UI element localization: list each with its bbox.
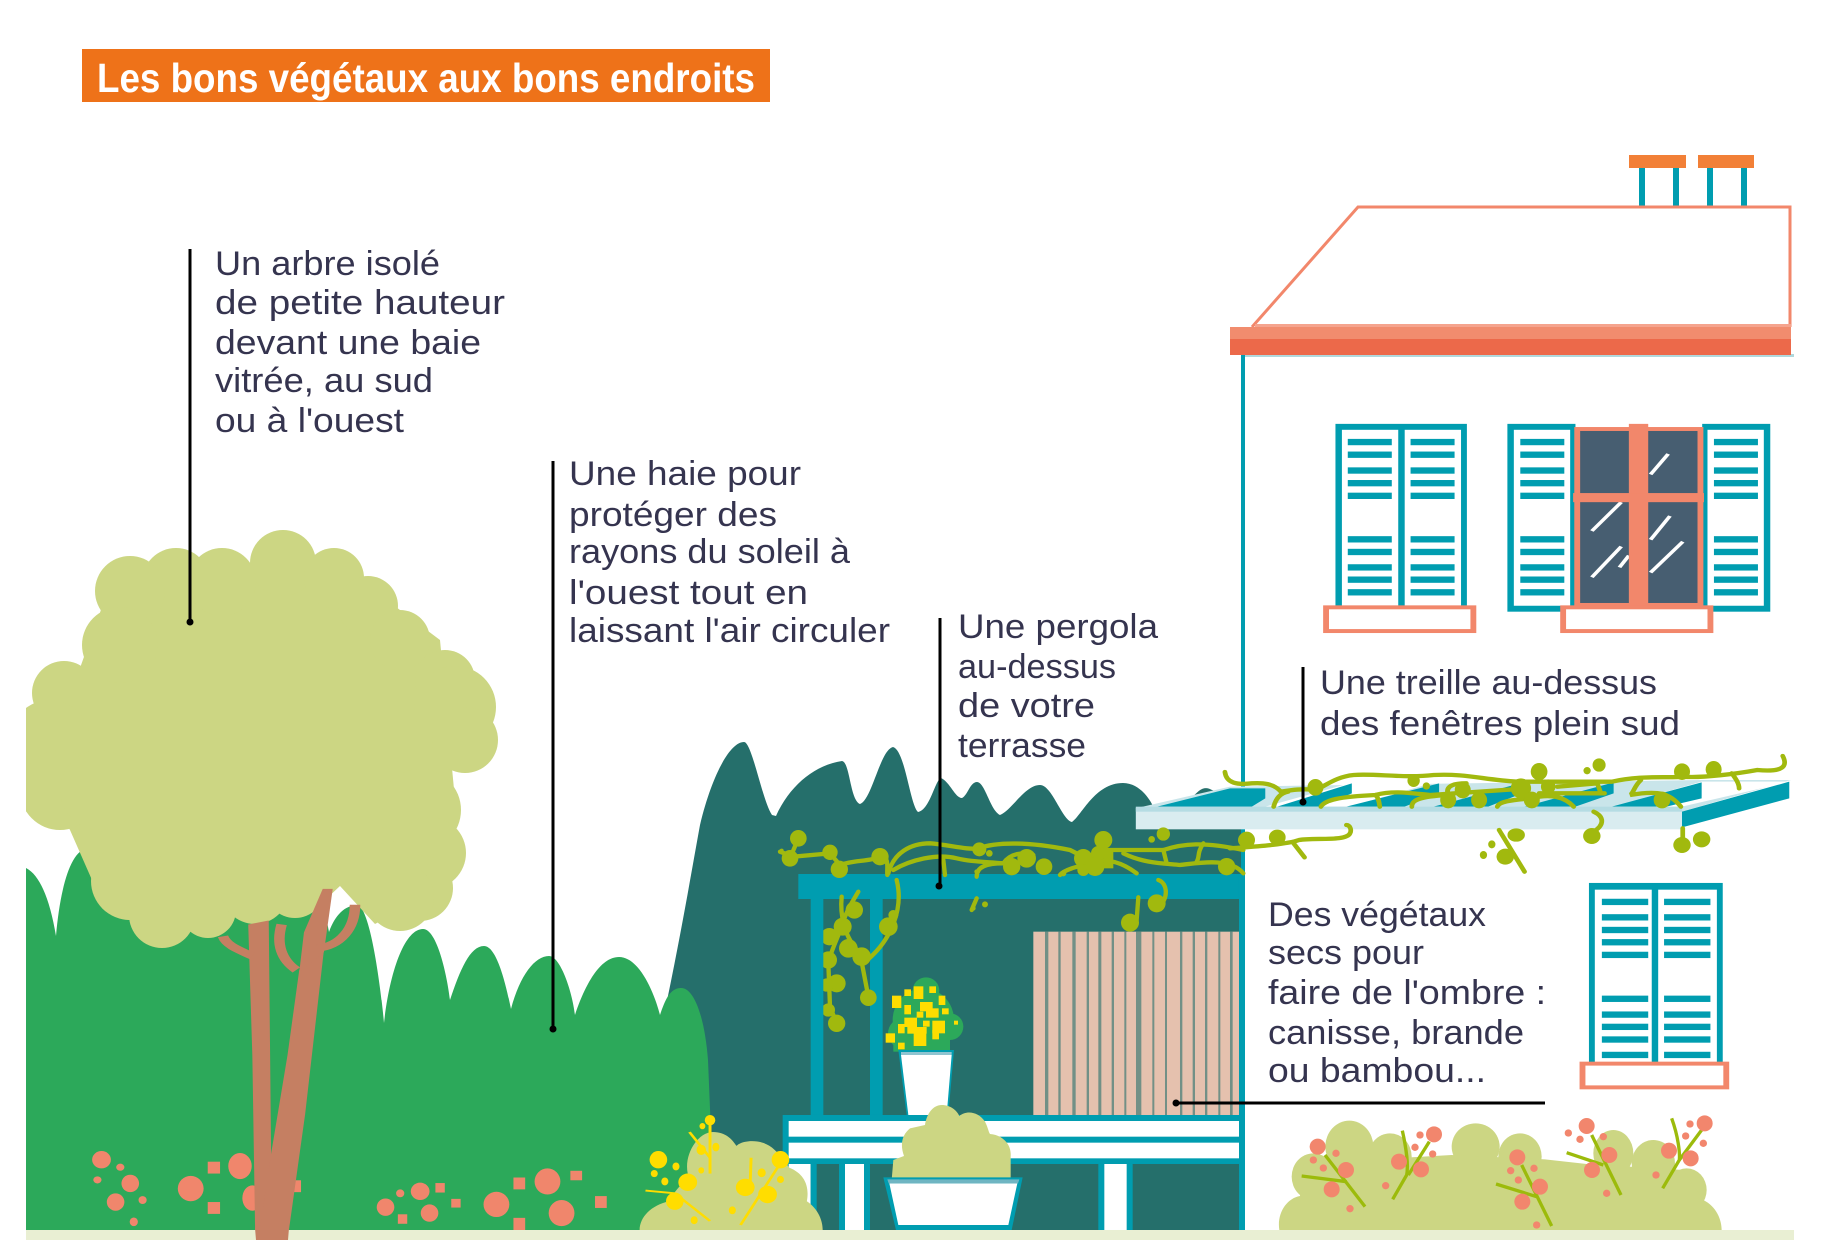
small potted plant xyxy=(886,977,963,1115)
title banner: Les bons végétaux aux bons endroits xyxy=(97,55,755,101)
house walls xyxy=(1241,354,1794,1230)
background dark hedge xyxy=(663,742,1243,1230)
tree canopy xyxy=(10,530,498,948)
callout: dry plants: Des végétaux xyxy=(1268,896,1486,934)
tree xyxy=(10,530,498,1240)
callout: isolated tree: Un arbre isolé xyxy=(215,245,440,283)
callout: pergola: terrasse xyxy=(958,727,1086,765)
callout: dry plants: secs pour xyxy=(1268,934,1424,972)
callout: dry plants: faire de l'ombre : xyxy=(1268,974,1546,1012)
foreground green hedge xyxy=(26,848,715,1230)
callout: pergola xyxy=(936,608,1158,890)
callout: dry plants: canisse, brande xyxy=(1268,1014,1524,1052)
pergola and terrace xyxy=(783,874,1245,1231)
lower window xyxy=(1582,883,1726,1087)
trunk base over ground xyxy=(255,1228,289,1240)
tree trunk and branches xyxy=(223,889,355,1240)
callout: hedge: laissant l'air circuler xyxy=(569,612,890,650)
callout: dry plants xyxy=(1172,896,1546,1106)
trellis slats xyxy=(1135,780,1791,829)
callout: isolated tree xyxy=(186,245,505,626)
hanging vines on pergola xyxy=(820,880,1166,1032)
upper left window xyxy=(1326,424,1473,631)
callout: trellis: Une treille au-dessus xyxy=(1320,664,1657,702)
callout: pergola: de votre xyxy=(958,687,1095,725)
trellis above south windows xyxy=(780,756,1791,878)
callout: hedge xyxy=(550,455,890,1032)
flowering shrub by the house xyxy=(1279,1115,1722,1230)
callout: dry plants: ou bambou... xyxy=(1268,1052,1486,1090)
house xyxy=(1230,155,1794,1230)
ground strip xyxy=(26,1230,1794,1240)
callout: pergola: Une pergola xyxy=(958,608,1158,646)
callout: hedge: l'ouest tout en xyxy=(569,574,808,612)
callout: isolated tree: de petite hauteur xyxy=(215,284,505,322)
callout: hedge: Une haie pour xyxy=(569,455,801,493)
callout: trellis: des fenêtres plein sud xyxy=(1320,705,1680,743)
callout: pergola: au-dessus xyxy=(958,648,1116,686)
callout: isolated tree: devant une baie xyxy=(215,324,481,362)
left pergola post xyxy=(811,899,823,1116)
yellow flowering shrub xyxy=(640,1115,823,1230)
pergola top vine xyxy=(780,827,1255,878)
terrace railing xyxy=(783,1115,1245,1230)
callout: hedge: protéger des xyxy=(569,496,777,534)
right pergola post and beam xyxy=(798,874,1245,1231)
hedge flower spots xyxy=(92,1151,607,1230)
callout: hedge: rayons du soleil à xyxy=(569,533,850,571)
roof xyxy=(1230,207,1791,355)
callout: isolated tree: vitrée, au sud xyxy=(215,362,433,400)
trellis vine xyxy=(1225,756,1785,872)
upper right window xyxy=(1507,424,1770,631)
reed screen canisse xyxy=(1033,932,1243,1115)
large potted shrub xyxy=(883,1105,1023,1230)
chimneys xyxy=(1629,155,1754,206)
callout: isolated tree: ou à l'ouest xyxy=(215,402,405,440)
callout: trellis xyxy=(1300,664,1680,806)
